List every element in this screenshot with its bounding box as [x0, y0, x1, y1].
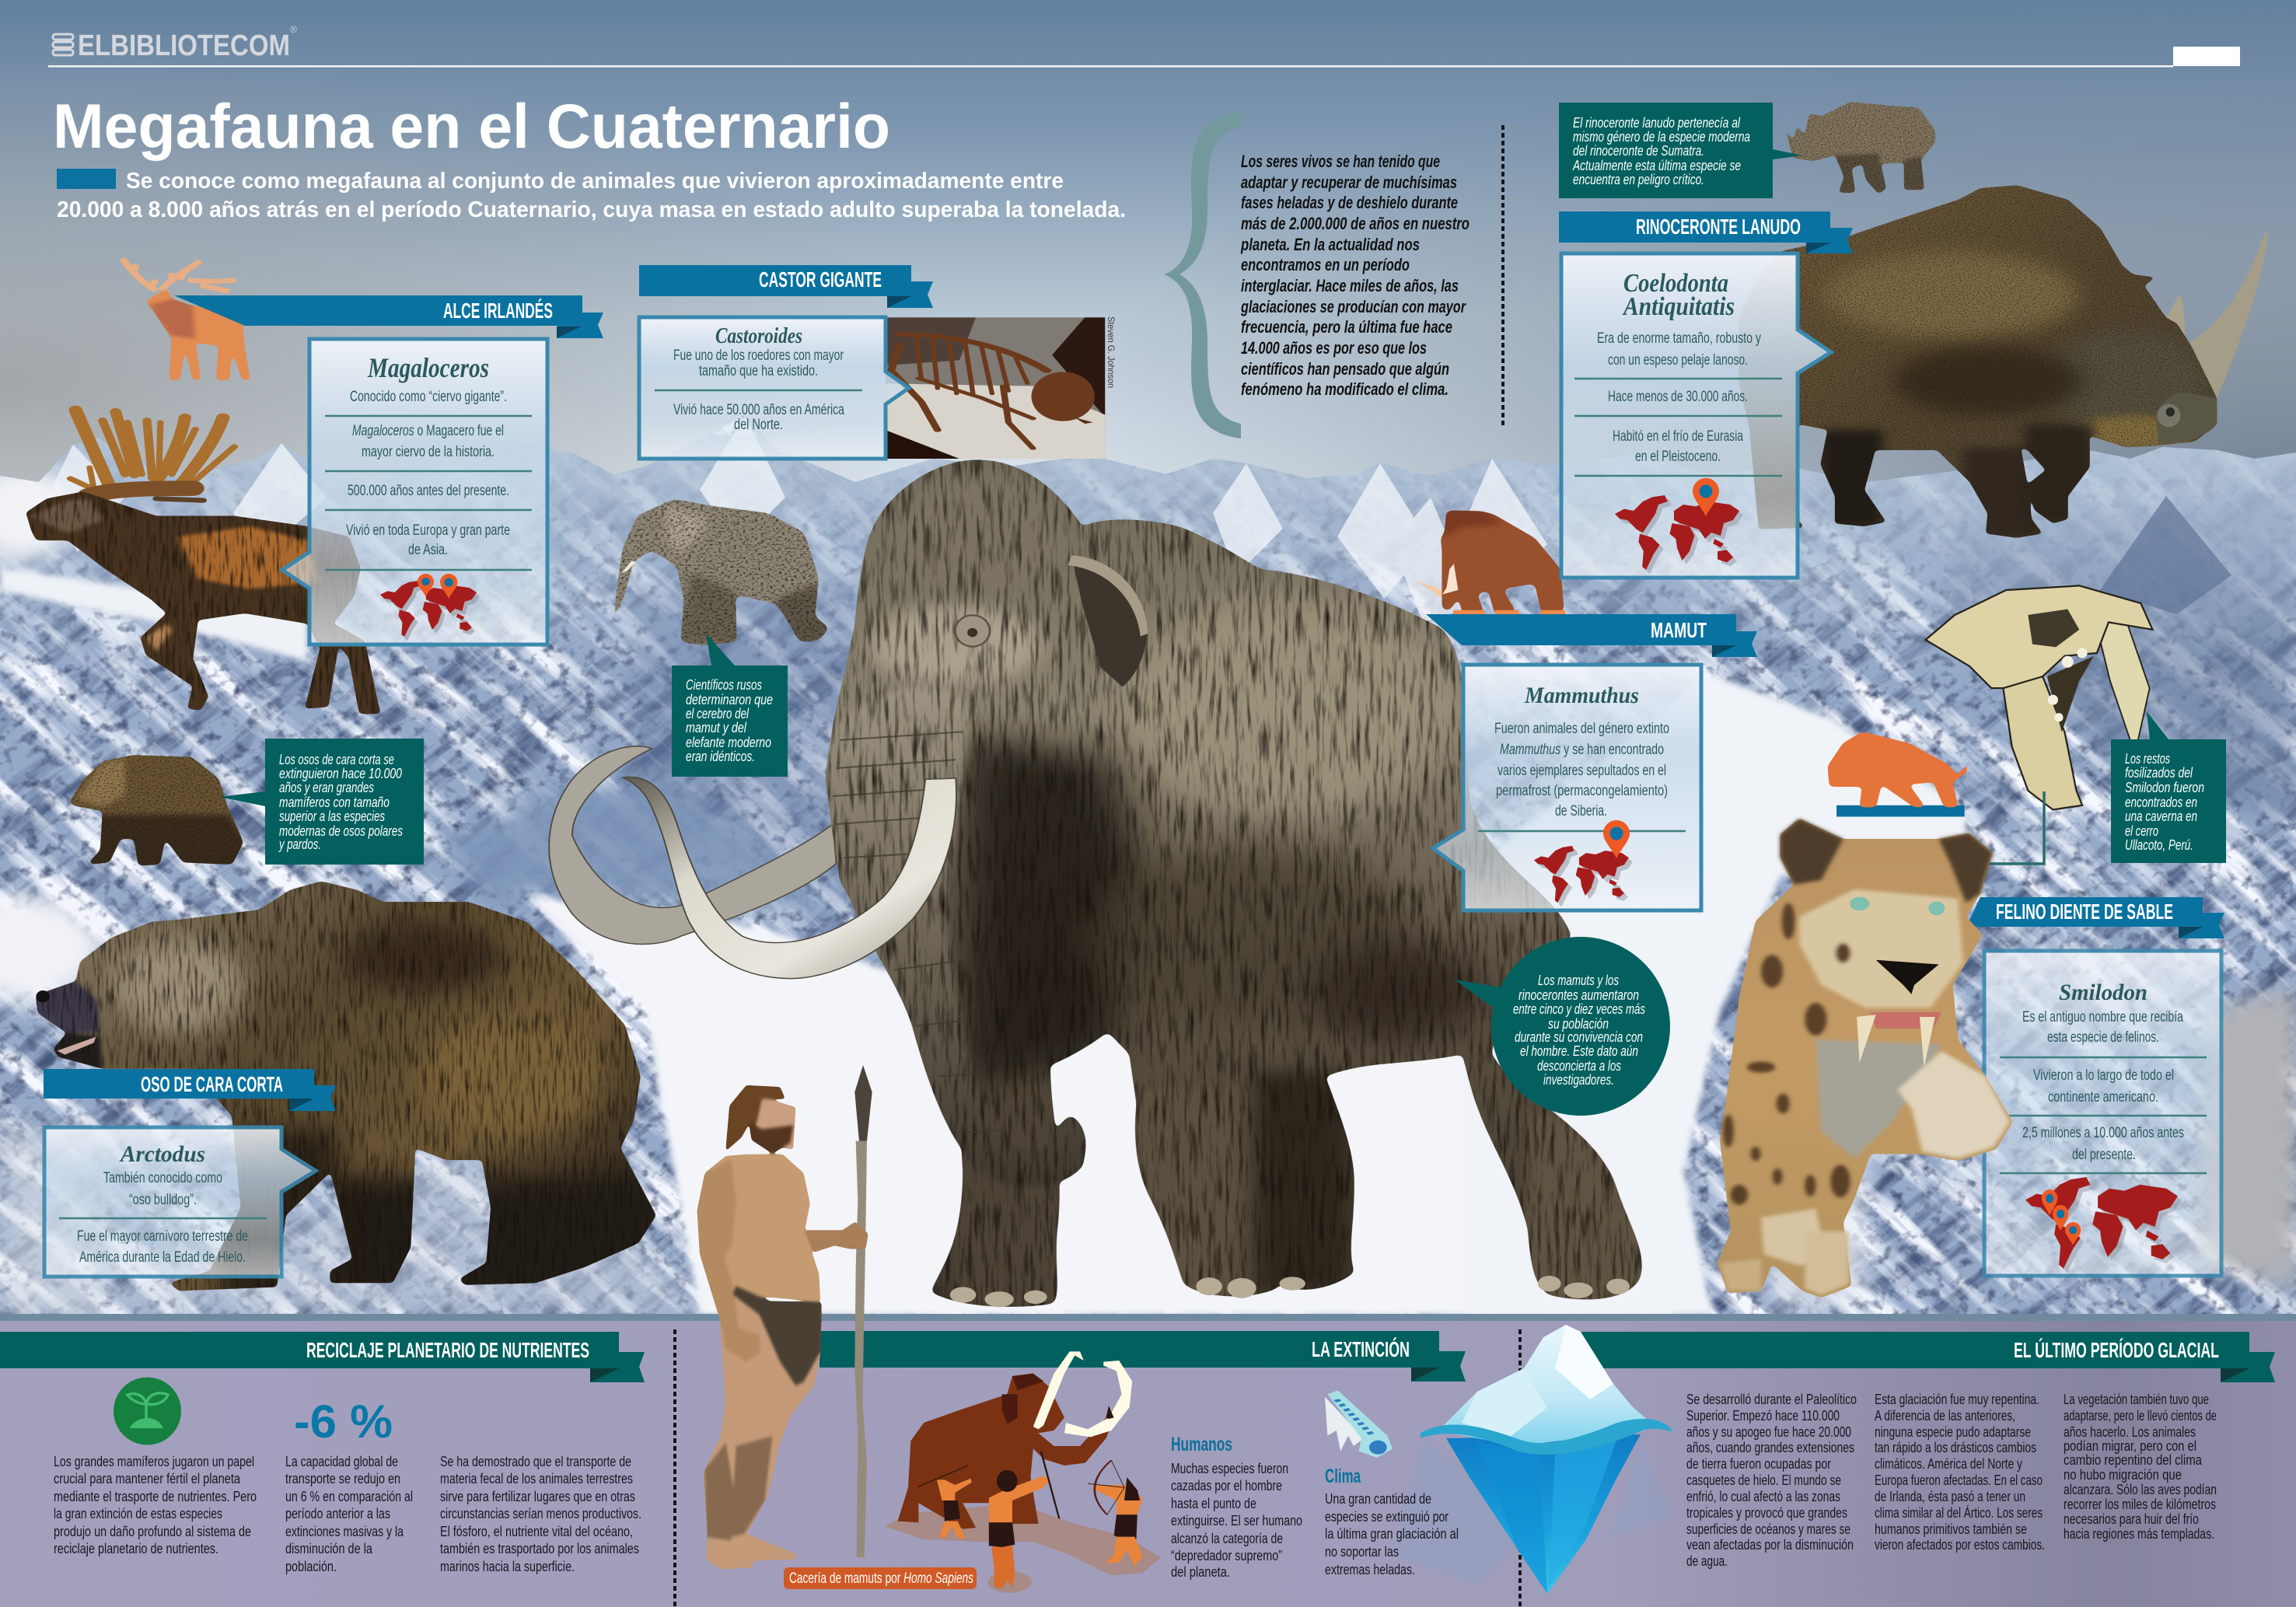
text: clima: extremas heladas. [1325, 1561, 1415, 1577]
panel: Smilodon [1984, 951, 2221, 1276]
panel: Arctodus [44, 1127, 316, 1277]
ribbon: oso de cara corta [44, 1069, 336, 1111]
panel: Magaloceros: Magaloceros o Magacero fue el [352, 423, 504, 439]
callout: mammoth population: desconcierta a los [1537, 1058, 1621, 1074]
ribbon: felino diente de sable: FELINO DIENTE DE SABLE [1996, 900, 2173, 924]
callout: mammoth population: entre cinco y diez veces más [1513, 1001, 1645, 1017]
text: humanos: hasta el punto de [1171, 1495, 1256, 1511]
ribbon: alce irlandes [174, 295, 603, 338]
text: glacial column 1: vean afectadas por la disminución [1686, 1536, 1854, 1553]
icon: world map with pins [2025, 1177, 2182, 1273]
panel: Magaloceros: Conocido como “ciervo gigante”. [350, 389, 507, 405]
text: nutrients column 1: mediante el trasporte de nutrientes. Pero [54, 1488, 257, 1504]
text: nutrients column 1: la gran extinción de estas especies [54, 1505, 222, 1521]
text: glacial column 2: tan rápido a los drásticos cambios [1875, 1439, 2036, 1455]
callout: rhino: Actualmente esta última especie se [1572, 158, 1741, 173]
caption: hunt: Cacería de mamuts por Homo Sapiens [789, 1570, 973, 1587]
illustration: woolly mammoth [623, 454, 1658, 1312]
panel: Mammuthus: de Siberia. [1555, 803, 1607, 819]
callout: smilodon fossils: Ullacoto, Perú. [2125, 837, 2193, 853]
callout: elephant [672, 634, 788, 777]
callout: mammoth population: rinocerontes aumentaron [1518, 987, 1639, 1003]
bottom band [0, 1314, 2296, 1607]
callout: smilodon fossils: fosilizados del [2125, 765, 2193, 781]
panel: Smilodon: del presente. [2072, 1147, 2136, 1163]
panel: Coelodonta: con un espeso pelaje lanoso. [1608, 352, 1748, 369]
climate paragraph: fases heladas y de deshielo durante [1241, 193, 1458, 212]
icon: world map with pins [380, 574, 480, 641]
ribbon: ultimo periodo glacial [1581, 1332, 2275, 1382]
climate paragraph: interglaciar. Hace miles de años, las [1241, 276, 1459, 295]
text: glacial column 3: necesarios para huir del frío [2064, 1511, 2199, 1527]
text: clima: Una gran cantidad de [1325, 1490, 1431, 1507]
panel: Smilodon: Es el antiguo nombre que recibía [2022, 1009, 2183, 1025]
snowy mountains background [0, 415, 2296, 1314]
panel: Magaloceros: Vivió en toda Europa y gran parte [346, 522, 510, 539]
text: glacial column 1: años y su apogeo fue hace 20.000 [1686, 1424, 1851, 1440]
callout: elephant: Científicos rusos [686, 677, 762, 693]
caption: hunt [784, 1567, 977, 1589]
text: glacial column 2: ninguna especie pudo adaptarse [1875, 1424, 2031, 1440]
ribbon: mamut [1426, 614, 1757, 657]
illustration: saber-toothed cat [1718, 819, 2013, 1298]
panel: Mammuthus: permafrost (permacongelamiento) [1496, 783, 1668, 799]
text: glacial column 3: no hubo migración que [2064, 1466, 2182, 1483]
text: nutrients column 3 [440, 1453, 641, 1574]
callout: elephant: determinaron que [686, 692, 773, 707]
callout: short-faced bears: y pardos. [278, 837, 321, 852]
climate paragraph [1240, 152, 1470, 399]
text: glacial column 1: años, cuando grandes extensiones [1686, 1439, 1854, 1455]
panel: Mammuthus: Mammuthus [1524, 683, 1639, 708]
text: nutrients column 2: período anterior a las [285, 1505, 390, 1521]
text: clima: la última gran glaciación al [1325, 1525, 1459, 1542]
callout: elephant: elefante moderno [686, 735, 771, 750]
text: glacial column 1: superficies de océanos y mares se [1686, 1521, 1850, 1537]
callout: smilodon fossils: el cerro [2125, 823, 2158, 839]
climate paragraph: glaciaciones se producían con mayor [1240, 297, 1466, 316]
panel: Smilodon: 2,5 millones a 10.000 años antes [2022, 1125, 2184, 1141]
ribbon: felino diente de sable [1966, 897, 2224, 938]
icon: plant in circle [114, 1378, 181, 1445]
illustration: small orange mammoth [1415, 510, 1565, 616]
panel: Castoroides: Fue uno de los roedores con mayor [673, 348, 844, 364]
panel: Coelodonta [1561, 253, 1831, 578]
text: glacial column 1: enfrió, lo cual afectó a las zonas [1686, 1488, 1840, 1504]
climate paragraph: encontramos en un período [1241, 255, 1410, 274]
panel: Castoroides: del Norte. [734, 417, 783, 433]
panel: Coelodonta: en el Pleistoceno. [1635, 449, 1721, 465]
panel: Mammuthus [1433, 665, 1701, 910]
panel: Arctodus: También conocido como [103, 1170, 222, 1186]
text: nutrients column 3: El fósforo, el nutriente vital del océano, [440, 1523, 633, 1539]
icon: world map with pin [1615, 478, 1743, 574]
text: glacial column 1: de tierra fueron ocupadas por [1686, 1455, 1831, 1472]
icon: world map with pin [1534, 820, 1633, 907]
ribbon: la extincion [820, 1331, 1466, 1382]
illustration: back tusk [549, 746, 837, 944]
illustration: human with spear [697, 1065, 872, 1569]
panel: Coelodonta: Era de enorme tamaño, robusto y [1597, 330, 1761, 347]
text: clima [1325, 1466, 1459, 1577]
panel: Smilodon: continente americano. [2048, 1089, 2158, 1106]
illustration: mammoth hunt [885, 1351, 1161, 1593]
panel: Coelodonta: Coelodonta [1623, 269, 1728, 298]
text: glacial column 2: climáticos. América del Norte y [1875, 1455, 2023, 1472]
callout: mammoth population: Los mamuts y los [1538, 973, 1619, 988]
connector line [1918, 791, 2044, 864]
climate paragraph: Los seres vivos se han tenido que [1241, 152, 1440, 171]
callout: elephant: el cerebro del [686, 706, 750, 721]
text: nutrients column 2: transporte se redujo en [285, 1470, 400, 1486]
ribbon: alce irlandes: ALCE IRLANDÉS [443, 299, 553, 323]
callout: mammoth population: el hombre. Este dato aún [1520, 1043, 1638, 1059]
text: nutrients column 2: extinciones masivas y la [285, 1523, 404, 1539]
intro text [57, 169, 1126, 222]
text: nutrients column 1: reciclaje planetario de nutrientes. [54, 1540, 218, 1556]
text: glacial column 2: clima similar al del Ártico. Los seres [1875, 1504, 2043, 1521]
text: glacial column 3: cambio repentino del clima [2064, 1452, 2203, 1468]
panel: Magaloceros: Magaloceros [367, 352, 489, 383]
callout: rhino: El rinoceronte lanudo pertenecía al [1573, 115, 1741, 131]
ribbon: castor gigante: CASTOR GIGANTE [759, 267, 882, 292]
text: nutrients column 1: produjo un daño profundo al sistema de [54, 1523, 251, 1539]
icon: small orange deer [122, 258, 250, 380]
callout: smilodon fossils: encontrados en [2125, 795, 2197, 810]
callout: short-faced bears: modernas de osos polares [279, 823, 403, 839]
text: nutrients column 3: también es trasportado por los animales [440, 1540, 639, 1556]
climate paragraph: científicos han pensado que algún [1241, 359, 1449, 379]
panel: Mammuthus: Mammuthus y se han encontrado [1500, 742, 1664, 758]
text: nutrients column 1: crucial para mantener fértil el planeta [54, 1470, 241, 1486]
climate paragraph: planeta. En la actualidad nos [1240, 235, 1420, 254]
text: clima: especies se extinguió por [1325, 1508, 1449, 1525]
panel: Smilodon: Vivieron a lo largo de todo el [2033, 1067, 2174, 1084]
logo: ® [290, 24, 297, 35]
illustration: African elephant [606, 499, 829, 645]
callout: mammoth population [1455, 937, 1670, 1116]
panel: Mammuthus: varios ejemplares sepultados en el [1497, 763, 1666, 779]
callout: smilodon fossils: una caverna en [2125, 809, 2197, 824]
panel: Castoroides: Castoroides [715, 324, 802, 348]
white tag [2173, 47, 2240, 66]
text: nutrients column 3: sirve para fertilizar lugares que en otras [440, 1488, 635, 1504]
callout: short-faced bears [219, 739, 424, 865]
panel: Magaloceros: mayor ciervo de la historia. [362, 444, 494, 460]
text: glacial column 3: alcanzara. Sólo las aves podían [2064, 1481, 2217, 1497]
climate paragraph: adaptar y recuperar de muchísimas [1241, 173, 1457, 192]
text: nutrients column 3: Se ha demostrado que el transporte de [440, 1453, 631, 1469]
icon: thermometer [1325, 1390, 1393, 1458]
climate paragraph: más de 2.000.000 de años en nuestro [1241, 214, 1470, 233]
text: glacial column 2: Esta glaciación fue muy repentina. [1875, 1391, 2039, 1407]
text: humanos [1171, 1434, 1302, 1580]
ribbon: reciclaje planetario: RECICLAJE PLANETARIO DE NUTRIENTES [306, 1338, 589, 1362]
text: humanos: extinguirse. El ser humano [1171, 1512, 1302, 1528]
text: glacial column 1: de agua. [1686, 1553, 1728, 1569]
text: glacial column 2: humanos primitivos también se [1875, 1521, 2027, 1537]
panel: Smilodon: Smilodon [2059, 980, 2147, 1005]
illustration: saber-tooth skull [1926, 585, 2152, 809]
text: humanos: alcanzó la categoría de [1171, 1530, 1283, 1546]
text: glacial column 2: de Irlanda, ésta pasó a tener un [1875, 1488, 2025, 1504]
ribbon: rinoceronte lanudo: RINOCERONTE LANUDO [1636, 215, 1801, 239]
photo credit: Steven G. Johnson [1106, 316, 1117, 388]
text: nutrients column 3: materia fecal de los animales terrestres [440, 1470, 633, 1486]
panel: Coelodonta: Habitó en el frío de Eurasia [1613, 428, 1743, 445]
callout: rhino: mismo género de la especie moderna [1573, 129, 1750, 145]
callout: short-faced bears: años y eran grandes [279, 780, 374, 795]
callout: smilodon fossils: Smilodon fueron [2125, 780, 2204, 795]
panel: Castoroides: Vivió hace 50.000 años en América [673, 402, 844, 418]
text: glacial column 2: Europa fueron afectadas. En el caso [1875, 1472, 2043, 1488]
panel: Smilodon: esta especie de felinos. [2047, 1029, 2159, 1046]
photo: Castoroides skeleton [886, 317, 1105, 459]
panel: Arctodus: Fue el mayor carnívoro terrestre de [77, 1228, 248, 1245]
title: Megafauna en el Cuaternario [53, 92, 890, 162]
ribbon: la extincion: LA EXTINCIÓN [1312, 1337, 1410, 1361]
climate paragraph: fenómeno ha modificado el clima. [1241, 379, 1449, 399]
intro text: Se conoce como megafauna al conjunto de animales que vivieron aproximadamente entre [126, 169, 1064, 194]
panel: Arctodus: América durante la Edad de Hielo. [79, 1249, 246, 1266]
text: nutrients column 2: un 6 % en comparación al [285, 1488, 413, 1504]
callout: short-faced bears: superior a las especies [279, 809, 385, 824]
callout: mammoth population: su población [1548, 1016, 1609, 1032]
callout: elephant: mamut y del [686, 720, 747, 735]
text: humanos: cazadas por el hombre [1171, 1477, 1282, 1493]
panel: Arctodus: “oso bulldog”. [129, 1192, 197, 1208]
text: glacial column 1: tropicales y provocó que grandes [1686, 1504, 1847, 1521]
panel: Castoroides: tamaño que ha existido. [699, 363, 818, 379]
text: glacial column 3: recorrer los miles de kilómetros [2064, 1496, 2216, 1512]
callout: rhino: encuentra en peligro crítico. [1573, 172, 1704, 187]
panel: Coelodonta: Hace menos de 30.000 años. [1608, 389, 1748, 405]
ribbon: mamut: MAMUT [1651, 618, 1707, 642]
climate paragraph: 14.000 años es por eso que los [1241, 338, 1427, 358]
text: glacial column 2: A diferencia de las anteriores, [1875, 1407, 2015, 1424]
callout: elephant: eran idénticos. [686, 749, 755, 764]
climate paragraph: frecuencia, pero la última fue hace [1241, 317, 1452, 337]
illustration: modern rhinoceros [1782, 102, 1935, 194]
text: humanos: Muchas especies fueron [1171, 1460, 1288, 1476]
callout: rhino: del rinoceronte de Sumatra. [1573, 143, 1704, 159]
text: glacial column 1 [1686, 1391, 1857, 1569]
illustration: giant short-faced bear [26, 874, 669, 1303]
ribbon: rinoceronte lanudo [1559, 211, 1853, 253]
panel: Magaloceros: 500.000 años antes del presente. [348, 483, 509, 499]
panel: Coelodonta: Antiquitatis [1622, 292, 1735, 321]
icon: small orange saber-tooth [1828, 732, 1970, 816]
text: glacial column 3: hacia regiones más templadas. [2064, 1525, 2214, 1542]
text: humanos: “depredador supremo” [1171, 1547, 1282, 1563]
text: glacial column 1: casquetes de hielo. El mundo se [1686, 1472, 1841, 1488]
header rule [48, 65, 2173, 67]
ribbon: reciclaje planetario [0, 1332, 645, 1382]
panel: Magaloceros: de Asia. [408, 542, 448, 558]
illustration: giant deer [26, 410, 380, 714]
text: nutrients column 2: La capacidad global de [285, 1453, 398, 1469]
icon: big brace [1164, 112, 1241, 438]
text: nutrients column 3: marinos hacia la superficie. [440, 1558, 575, 1574]
text: nutrients column 2 [285, 1453, 413, 1574]
callout: smilodon fossils: Los restos [2125, 751, 2170, 767]
text: nutrients column 1 [54, 1453, 257, 1556]
panel: Mammuthus: Fueron animales del género extinto [1494, 721, 1669, 737]
callout: short-faced bears: mamíferos con tamaño [279, 795, 390, 810]
illustration: small modern bear [69, 755, 243, 865]
text: glacial column 3: podían migrar, pero con el [2064, 1438, 2196, 1454]
panel: Magaloceros [282, 339, 547, 645]
callout: smilodon fossils [2111, 711, 2226, 863]
text: nutrients column 2: población. [285, 1558, 337, 1574]
illustration: woolly rhinoceros [1737, 183, 2268, 539]
logo: ELBIBLIOTECOM [78, 30, 290, 62]
text: glacial column 2 [1875, 1391, 2045, 1553]
ribbon: castor gigante [639, 265, 933, 308]
callout: short-faced bears: extinguieron hace 10.000 [279, 766, 402, 781]
stat: minus six percent: -6 % [294, 1396, 393, 1448]
callout: short-faced bears: Los osos de cara corta se [279, 752, 394, 767]
text: glacial column 3 [2064, 1391, 2217, 1542]
text: nutrients column 3: circunstancias serían menos productivos. [440, 1505, 641, 1521]
callout: rhino [1559, 103, 1802, 198]
text: clima: no soportar las [1325, 1543, 1399, 1560]
text: humanos: del planeta. [1171, 1563, 1230, 1580]
text: clima: Clima [1325, 1466, 1361, 1487]
text: glacial column 3: años hacerlo. Los animales [2064, 1424, 2196, 1440]
text: humanos: Humanos [1171, 1434, 1232, 1455]
callout: mammoth population: durante su convivencia con [1515, 1029, 1643, 1045]
panel: Castoroides [639, 317, 909, 459]
text: glacial column 3: La vegetación también tuvo que [2064, 1391, 2209, 1407]
panel: Arctodus: Arctodus [119, 1141, 205, 1167]
illustration: iceberg [1392, 1325, 1673, 1594]
text: glacial column 2: vieron afectados por estos cambios. [1875, 1536, 2045, 1553]
ribbon: oso de cara corta: OSO DE CARA CORTA [141, 1072, 283, 1096]
text: nutrients column 2: disminución de la [285, 1540, 373, 1556]
text: glacial column 1: Se desarrolló durante el Paleolítico [1686, 1391, 1857, 1407]
intro text: 20.000 a 8.000 años atrás en el período Cuaternario, cuya masa en estado adulto superaba la tonelada. [57, 197, 1126, 222]
text: nutrients column 1: Los grandes mamíferos jugaron un papel [54, 1453, 254, 1469]
text: glacial column 3: adaptarse, pero le llevó cientos de [2064, 1407, 2217, 1424]
text: glacial column 1: Superior. Empezó hace 110.000 [1686, 1407, 1840, 1424]
callout: mammoth population: investigadores. [1543, 1072, 1614, 1088]
